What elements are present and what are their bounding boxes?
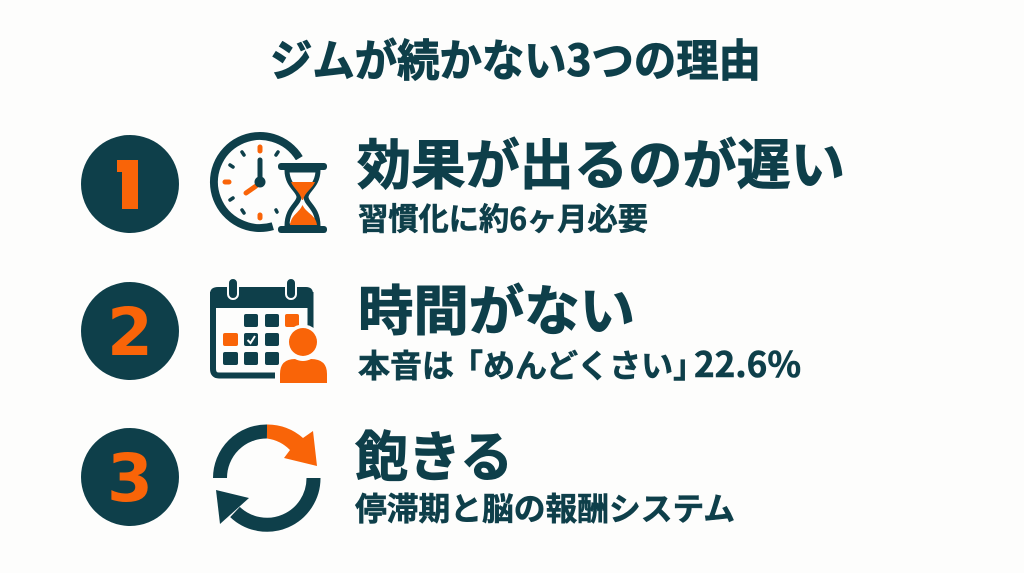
number badge 1 bbox=[81, 135, 179, 233]
heading 3: 飽きる bbox=[355, 413, 513, 492]
number badge 3: 3 bbox=[107, 440, 153, 517]
title: ジムが続かない3つの理由 bbox=[270, 25, 761, 89]
subtext 2: 「めんどくさい」 bbox=[451, 341, 705, 387]
heading 2: 時間がない bbox=[358, 267, 635, 346]
number badge 2: 2 bbox=[107, 294, 153, 371]
panel: reason 1 bbox=[81, 121, 845, 239]
subtext 3: 停滞期と脳の報酬システム bbox=[355, 484, 735, 530]
subtext 1: 習慣化に約6ヶ月必要 bbox=[358, 194, 648, 239]
icon: calendar and person bbox=[210, 278, 327, 383]
panel: reason 2 bbox=[81, 267, 801, 388]
icon: clock and hourglass bbox=[214, 136, 328, 233]
heading 1: 効果が出るのが遅い bbox=[357, 121, 845, 200]
subtext 2: 22.6% bbox=[694, 337, 801, 388]
number badge 2 bbox=[81, 282, 179, 380]
panel: reason 3 bbox=[81, 413, 735, 530]
icon: cycle arrows bbox=[216, 424, 317, 525]
number badge 3 bbox=[81, 428, 179, 526]
subtext 2: 本音は bbox=[358, 341, 454, 387]
